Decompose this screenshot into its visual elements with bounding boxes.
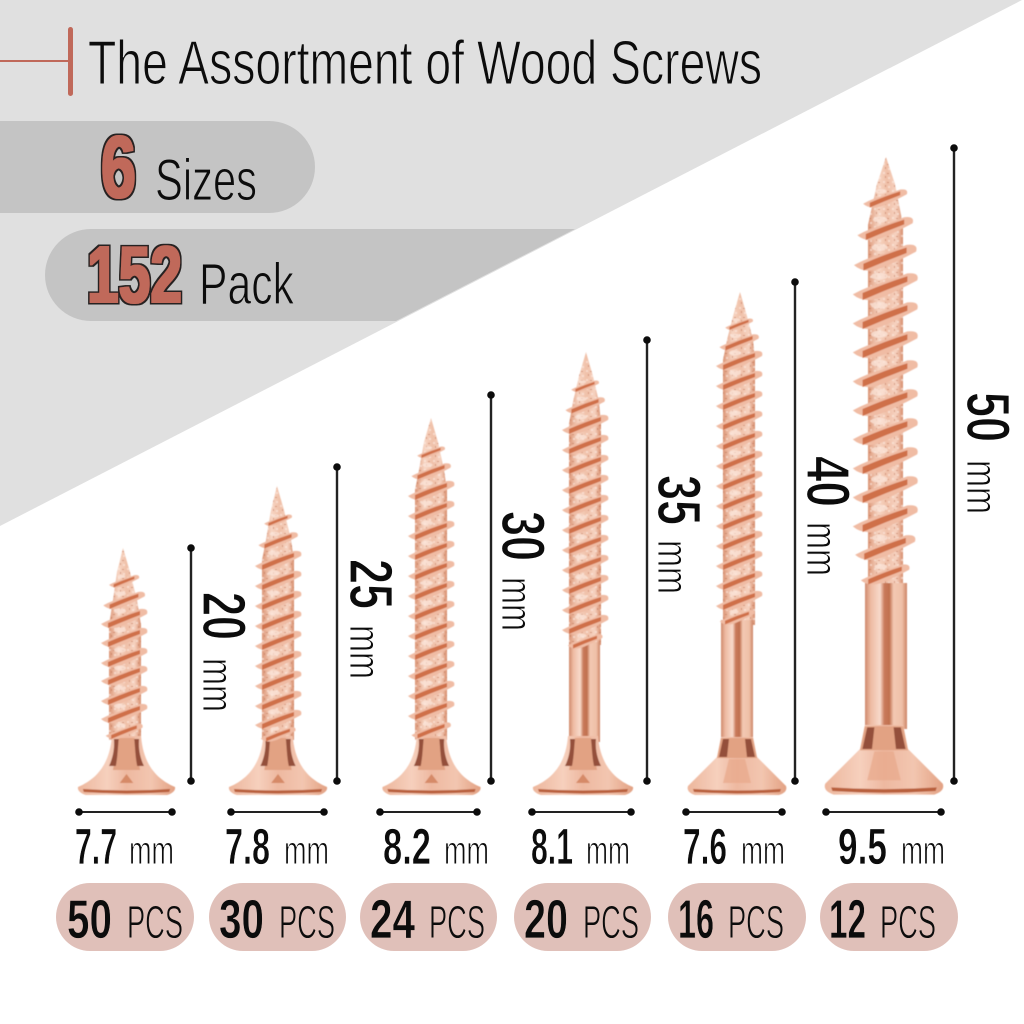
screw 5: 40 mm <box>688 292 786 795</box>
badge: 6 sizes: Sizes <box>155 148 257 213</box>
quantity pill: 50 PCS <box>56 883 194 951</box>
length label: 20 mm <box>190 592 258 712</box>
badge: 152 pack <box>45 229 575 321</box>
length label: 50 mm: mm <box>957 460 1006 514</box>
length label: 25 mm: 25 <box>337 559 405 609</box>
width label: 7.6 mm <box>683 818 785 875</box>
width label: 7.8 mm: mm <box>284 829 329 873</box>
quantity pill: 30 PCS: PCS <box>279 896 335 948</box>
length dimension lines <box>187 144 958 785</box>
width label: 7.6 mm: mm <box>741 829 785 873</box>
screw 3: 30 mm <box>382 418 481 795</box>
width label: 8.2 mm <box>383 818 489 875</box>
head width dimension lines <box>75 808 945 816</box>
width label: 8.1 mm: 8.1 <box>531 818 573 875</box>
length label: 40 mm <box>794 456 862 576</box>
length label: 40 mm: 40 <box>794 456 862 507</box>
length label: 25 mm: mm <box>340 625 389 679</box>
width label: 7.7 mm: mm <box>129 829 174 873</box>
quantity pill: 24 PCS: 24 <box>370 888 415 950</box>
screw 4: 35 mm <box>533 352 633 795</box>
badge: 6 sizes <box>0 119 315 216</box>
length label: 50 mm: 50 <box>954 392 1022 442</box>
width label: 8.2 mm: 8.2 <box>383 818 431 875</box>
length label: 35 mm: 35 <box>645 475 713 525</box>
length label: 35 mm <box>645 475 713 594</box>
badge: 6 sizes: 6 <box>101 119 136 216</box>
width label: 7.8 mm <box>225 818 329 875</box>
quantity pill: 50 PCS: PCS <box>127 896 183 948</box>
width label: 9.5 mm: 9.5 <box>838 818 887 875</box>
screw 1: 20 mm <box>78 548 175 795</box>
width label: 7.7 mm: 7.7 <box>75 818 117 875</box>
length label: 30 mm <box>489 511 557 631</box>
quantity pill: 30 PCS <box>209 883 346 951</box>
length label: 35 mm: mm <box>648 540 697 594</box>
length label: 30 mm: 30 <box>489 511 557 561</box>
screw 6: 50 mm <box>825 157 943 795</box>
background diagonal panel <box>0 0 1022 526</box>
length label: 25 mm <box>337 559 405 679</box>
width label: 8.1 mm: mm <box>586 829 630 873</box>
quantity pill: 50 PCS: 50 <box>67 888 112 950</box>
width label: 8.2 mm: mm <box>444 829 489 873</box>
quantity pill: 12 PCS <box>820 883 958 951</box>
quantity pill: 12 PCS: PCS <box>880 896 936 948</box>
header accent marker <box>0 27 73 96</box>
quantity pill: 20 PCS: 20 <box>524 888 568 950</box>
quantity pill: 20 PCS: PCS <box>583 896 639 948</box>
quantity pill: 24 PCS <box>360 883 497 951</box>
quantity pill: 16 PCS: 16 <box>678 888 714 950</box>
quantity pill: 12 PCS: 12 <box>829 888 866 950</box>
length label: 20 mm: mm <box>193 658 242 712</box>
length label: 20 mm: 20 <box>190 592 258 640</box>
length label: 40 mm: mm <box>797 522 846 576</box>
quantity pill: 24 PCS: PCS <box>429 896 485 948</box>
quantity pill: 16 PCS <box>668 883 806 951</box>
width label: 7.6 mm: 7.6 <box>683 818 727 875</box>
badge: 152 pack: 152 <box>87 230 182 319</box>
title: The Assortment of Wood Screws <box>88 29 762 98</box>
screw 2: 25 mm <box>229 486 327 795</box>
quantity pill: 16 PCS: PCS <box>728 896 784 948</box>
length label: 30 mm: mm <box>492 577 541 631</box>
badge: 152 pack: Pack <box>199 252 295 317</box>
length label: 50 mm <box>954 392 1022 514</box>
width label: 7.8 mm: 7.8 <box>225 818 270 875</box>
quantity pill: 30 PCS: 30 <box>219 888 264 950</box>
width label: 9.5 mm: mm <box>901 829 945 873</box>
width label: 9.5 mm <box>838 818 945 875</box>
quantity pill: 20 PCS <box>514 883 651 951</box>
